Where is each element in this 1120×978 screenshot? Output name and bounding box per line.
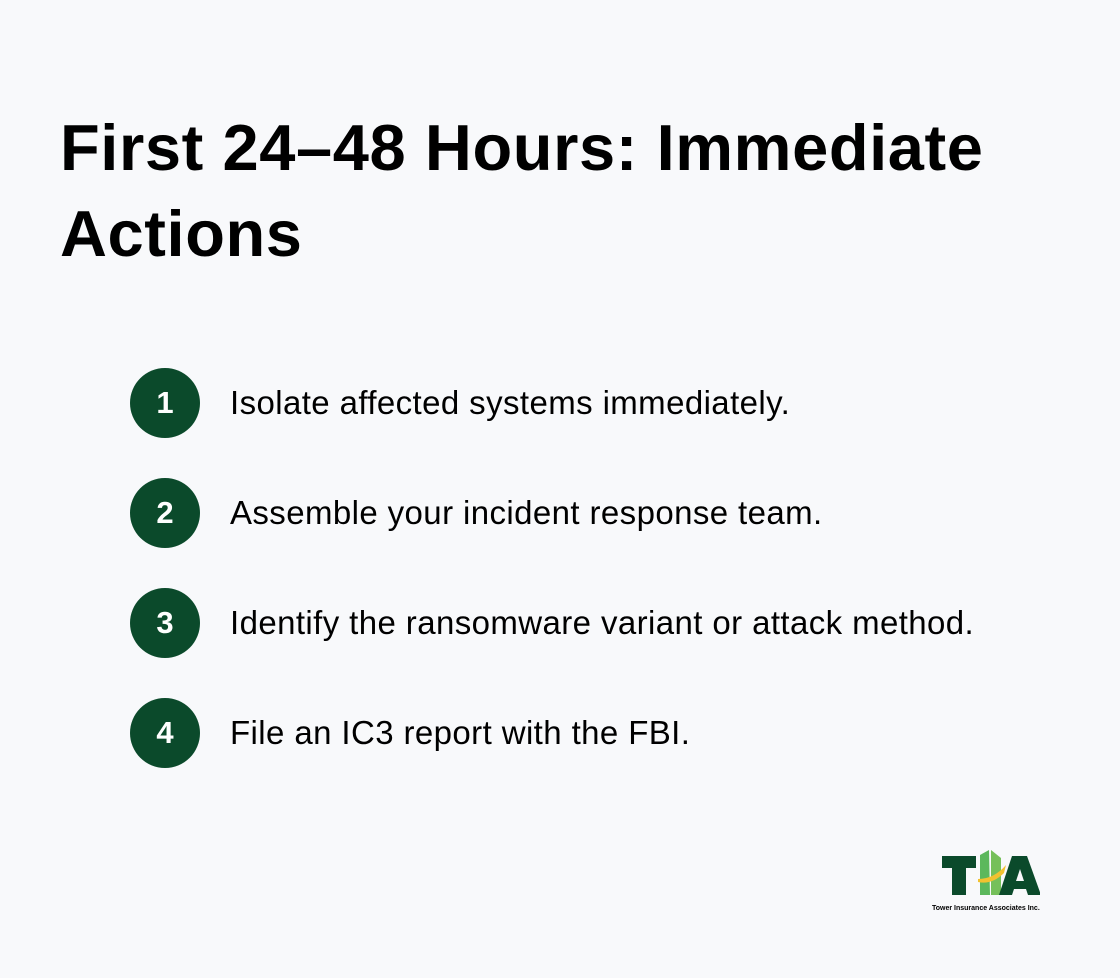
step 2: 2: [156, 495, 174, 530]
step 1: Isolate affected systems immediately.: [230, 384, 790, 421]
step 1: 1: [156, 385, 174, 420]
step 3: 3: [156, 605, 174, 640]
step 4: 4: [156, 715, 174, 750]
title: Actions: [60, 197, 303, 270]
step 4: [130, 698, 690, 768]
step 3: Identify the ransomware variant or attack method.: [230, 604, 974, 641]
step 2: Assemble your incident response team.: [230, 494, 823, 531]
step 4: File an IC3 report with the FBI.: [230, 714, 690, 751]
logo: [932, 850, 1040, 912]
logo: Tower Insurance Associates Inc.: [932, 905, 1040, 912]
title: [60, 111, 984, 270]
step 3: [130, 588, 974, 658]
step 2: [130, 478, 823, 548]
title: First 24–48 Hours: Immediate: [60, 111, 984, 184]
step 1: [130, 368, 790, 438]
